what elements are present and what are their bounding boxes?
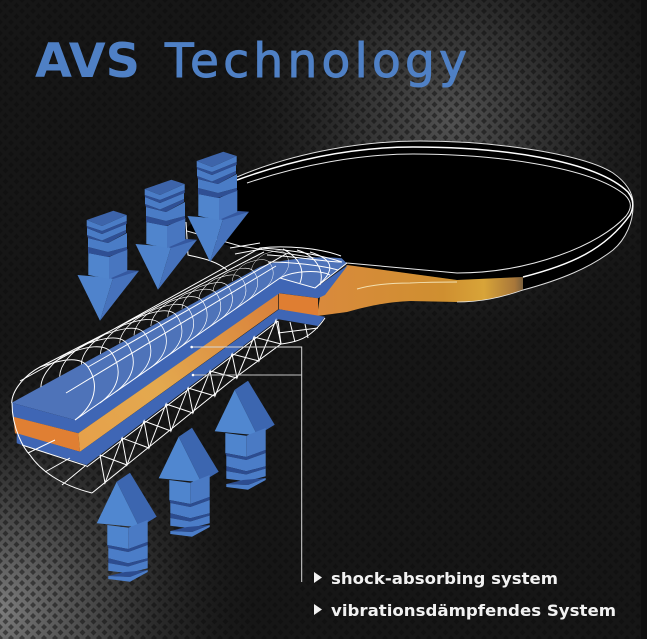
title: AVS [35,34,140,89]
up arrow middle [159,428,219,537]
wire mesh upper [12,247,347,420]
up arrow lower left [97,473,157,582]
wood layer notch [279,293,318,317]
handle cross-section layers [12,257,348,465]
wood layer long side [78,294,278,452]
head to handle connector lines [186,222,262,270]
up arrow upper right [215,381,275,490]
lower blue layer [17,309,325,465]
bullet and label: vibrationsdämpfendes System: vibrationsdämpfendes System [331,601,616,620]
leader lines [190,346,302,582]
title: Technology [164,34,467,89]
blue layer side [12,265,348,433]
title [35,34,467,89]
wire mesh lower [12,318,325,493]
wood layer end [13,417,80,452]
paddle handle wood [317,265,523,316]
top foam layer [12,257,347,420]
down arrow middle [136,180,197,290]
bullet and label: shock-absorbing system: shock-absorbing system [331,569,558,588]
legend text [314,569,616,620]
down arrow left [78,211,139,321]
paddle head [185,141,633,290]
down arrow right [188,152,249,262]
